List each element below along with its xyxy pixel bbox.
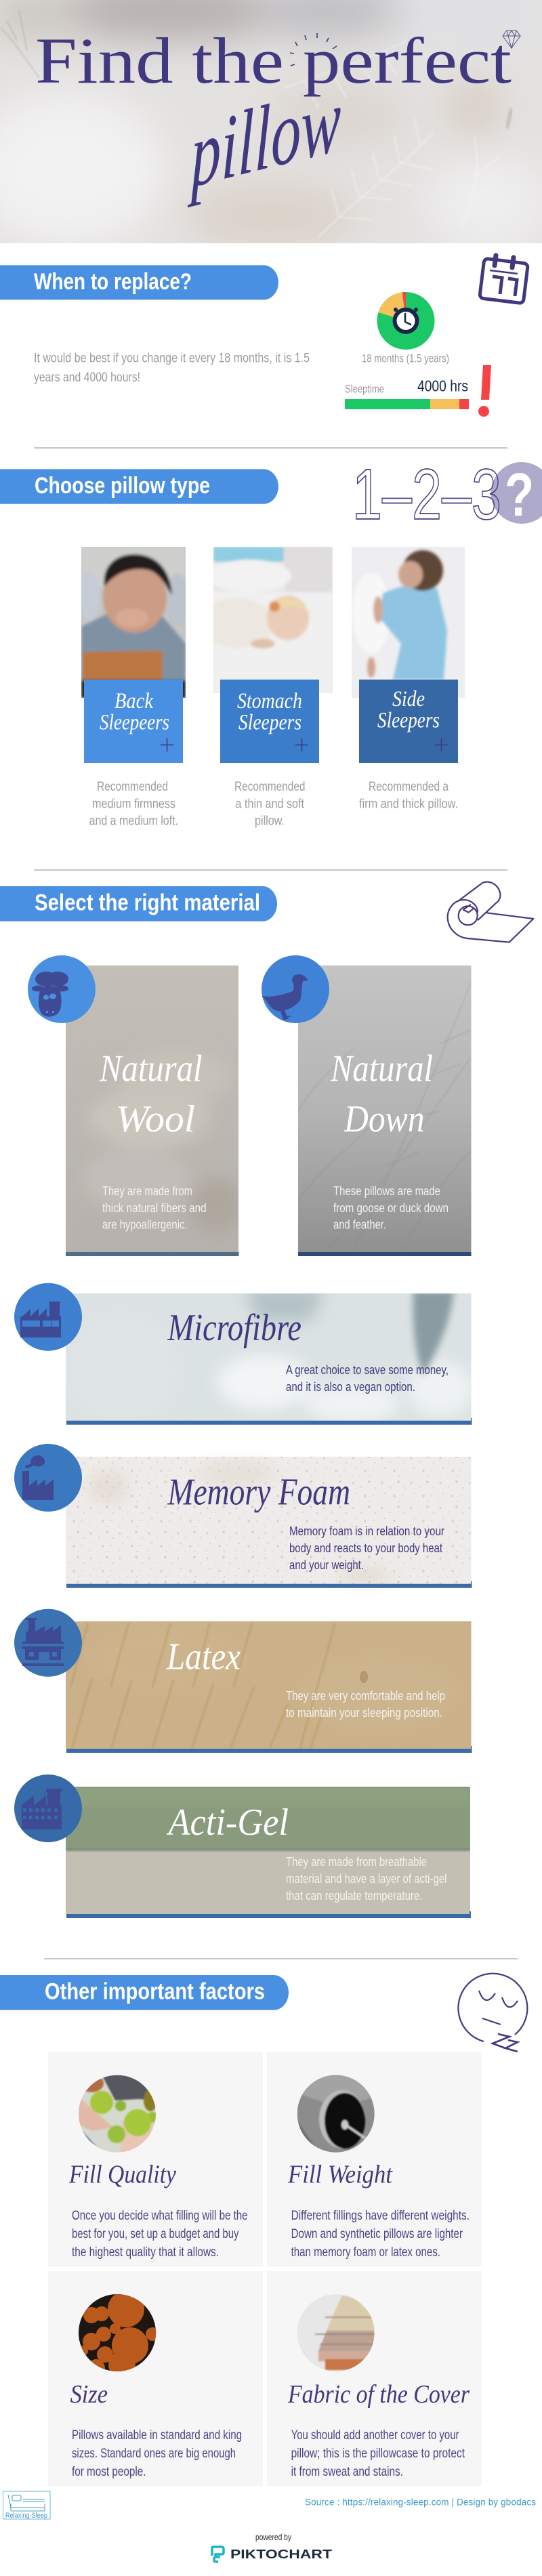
box: Side Sleepers [359,680,458,763]
card: Memory Foam [66,1457,472,1588]
heading pill: When to replace?: When to replace? [34,269,192,295]
icon: question circle: ? [505,461,534,529]
card: Natural Down: Down [343,1098,424,1140]
icon: calendar [480,255,528,304]
text: replacement advice: years and 4000 hours! [34,371,140,385]
icon: factory badge 2 [14,1444,82,1512]
icon: factory badge 4 [14,1774,82,1842]
card: Memory Foam: body and reacts to your body heat [289,1541,442,1555]
icon: rolled material [448,882,533,942]
icon: factory badge 1 [14,1283,82,1351]
card: Natural Wool: They are made from [102,1184,192,1198]
card: Latex: They are very comfortable and help [286,1688,445,1703]
text: Fabric body: pillow; this is the pillowcase to protect [291,2447,465,2461]
hero banner with feather photo [0,0,542,251]
card: Microfibre [61,1287,474,1430]
text: back sleepers recommendation [89,780,178,829]
text: Fabric body: it from sweat and stains. [291,2465,403,2479]
text: Size body: for most people. [72,2465,146,2479]
text: Fill Quality body: Once you decide what filling will be the [72,2209,248,2223]
text: stomach sleepers recommendation: a thin and soft [236,797,305,811]
panel: Fabric of the Cover [267,2271,482,2486]
text: stomach sleepers recommendation [234,780,305,829]
card: Acti-Gel: They are made from breathable [286,1854,427,1869]
panel: Fill Weight [267,2052,482,2267]
title: Find the perfect: Find the perfect [35,24,512,97]
icon: duck badge [262,955,329,1023]
title: pillow script: pillow [188,68,341,208]
text: Size body [72,2428,242,2479]
text: back sleepers recommendation: and a medium loft. [89,814,178,829]
heading: Fill Weight: Fill Weight [287,2161,393,2189]
heading pill: When to replace? [0,265,278,299]
card: Natural Wool: thick natural fibers and [102,1201,207,1215]
card: Latex [66,1621,472,1755]
bar value: 4000 hrs: 4000 hrs [417,377,468,394]
heading pill: Select the right material [0,886,277,921]
text: side sleepers recommendation [359,780,458,811]
bar label: Sleeptime: Sleeptime [345,383,384,396]
icon: exclamation mark [478,365,491,417]
card: Microfibre: A great choice to save some money, [286,1363,449,1377]
photo: baby on side [352,547,465,698]
pie caption: 18 months (1.5 years) [362,352,449,365]
text: Size body: Pillows available in standard and king [72,2428,242,2443]
box: Back Sleepers: Sleepeers [100,711,169,735]
source credit: Source : https://relaxing-sleep.com | Design by gbodacs [305,2497,536,2508]
section: select material [0,882,533,1918]
box: Back Sleepers: Back [114,689,154,713]
logo: Relaxing-Sleep [3,2491,50,2520]
card: Natural Wool: Wool [116,1098,195,1140]
text: Fabric body: You should add another cover to your [291,2428,459,2443]
text: side sleepers recommendation: Recommended a [369,780,449,794]
photo: pumpkins [79,2294,156,2371]
card: Acti-Gel: that can regulate temperature. [286,1888,423,1903]
section: choose pillow type [0,455,542,829]
text: Fill Weight body [291,2209,470,2260]
card: Acti-Gel: Acti-Gel [166,1802,289,1844]
heading pill: Select the right material: Select the right material [35,890,260,916]
text: replacement advice [34,351,310,385]
text: back sleepers recommendation: medium firmness [92,797,175,811]
text: Fill Weight body: Down and synthetic pillows are lighter [291,2227,463,2241]
icon: sheep badge [28,955,96,1023]
photo: baby on stomach [207,547,333,694]
logo: Relaxing-Sleep: Relaxing-Sleep [5,2512,47,2520]
card: Natural Down [298,965,472,1256]
heading: Fabric of the Cover: Fabric of the Cover [287,2380,470,2409]
panel: Size [48,2271,263,2486]
text: Size body: sizes. Standard ones are big enough [72,2447,236,2461]
text: Fabric body [291,2428,465,2479]
stacked bar [345,399,469,409]
text: back sleepers recommendation: Recommended [97,780,168,794]
card: Memory Foam: and your weight. [289,1558,364,1572]
footer: powered by Piktochart [212,2533,333,2562]
panel: Fill Quality [48,2052,263,2267]
heading pill: Other important factors [0,1975,289,2010]
pie chart with clock [377,292,435,350]
footer: powered by Piktochart: PIKTOCHART [230,2547,333,2561]
card: Natural Wool: Natural [99,1047,202,1089]
box: Stomach Sleepers [220,680,319,763]
text: Fill Weight body: than memory foam or latex ones. [291,2245,440,2260]
card: Natural Down: Natural [330,1047,433,1089]
box: Side Sleepers: Side [392,687,425,711]
card: Acti-Gel: material and have a layer of acti-gel [286,1871,447,1886]
text: stomach sleepers recommendation: pillow. [255,814,285,829]
photo: apples [79,2075,158,2153]
icon: sleeping face [458,1974,527,2052]
card: Natural Down: from goose or duck down [333,1201,449,1215]
card: Latex: Latex [166,1636,241,1678]
text: stomach sleepers recommendation: Recommended [234,780,305,794]
box: Stomach Sleepers: Sleepers [238,711,301,735]
card: Natural Down: and feather. [333,1218,386,1232]
box: Side Sleepers: Sleepers [377,709,440,733]
text: Fill Quality body: best for you, set up a budget and buy [72,2227,239,2241]
icon: factory badge 3 [14,1609,82,1677]
footer: powered by Piktochart: powered by [255,2533,292,2542]
text: Fill Quality body: the highest quality that it allows. [72,2245,219,2260]
box: Stomach Sleepers: Stomach [237,689,302,713]
text: side sleepers recommendation: firm and thick pillow. [359,797,458,811]
section: when to replace [0,255,528,417]
icon: sun rays [290,33,337,66]
card: Latex: to maintain your sleeping position. [286,1705,442,1720]
card: Memory Foam: Memory Foam [167,1472,350,1514]
card: Natural Wool [66,965,244,1256]
photo: fabric stack [297,2294,375,2372]
heading pill: Choose pillow type: Choose pillow type [35,473,210,499]
text: replacement advice: It would be best if you change it every 18 months, it is 1.5 [34,351,310,366]
heading: Fill Quality: Fill Quality [68,2161,176,2189]
card: Microfibre: Microfibre [167,1307,301,1349]
heading: Size: Size [70,2380,108,2409]
photo: baby on back [79,547,188,698]
card: Microfibre: and it is also a vegan option. [286,1379,415,1394]
box: Back Sleepers [84,680,183,763]
icon: diamond [503,30,520,48]
heading pill: Other important factors: Other important factors [45,1979,265,2005]
text: Fill Weight body: Different fillings have different weights. [291,2209,470,2223]
text: Fill Quality body [72,2209,248,2260]
photo: barbell [297,2075,375,2153]
card: Natural Down: These pillows are made [333,1184,440,1198]
heading pill: Choose pillow type [0,469,278,504]
card: Memory Foam: Memory foam is in relation to your [289,1524,444,1538]
section: other factors [0,1974,527,2486]
card: Acti-Gel [66,1787,471,1918]
card: Natural Wool: are hypoallergenic. [102,1218,187,1232]
